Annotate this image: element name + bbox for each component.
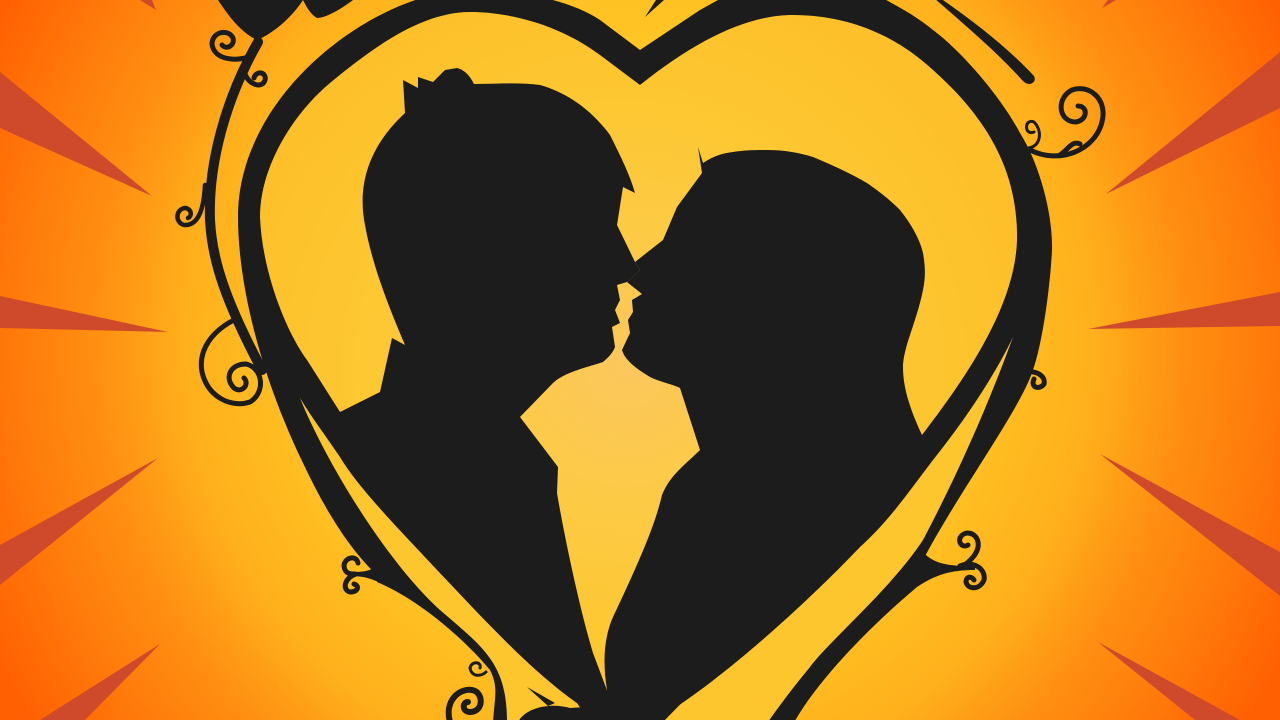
left big curl — [201, 318, 261, 404]
left yellow gap — [300, 398, 595, 720]
top and bottom ornaments — [218, 0, 664, 720]
right yellow gap — [655, 337, 1013, 720]
left lower curl — [344, 558, 358, 592]
right vine curl tail — [917, 552, 975, 587]
bottom left curls — [449, 690, 481, 720]
butterfly wings — [218, 0, 303, 40]
heart inner yellow — [260, 12, 1017, 702]
heart outer dark shape with both vines merged — [238, 0, 1052, 720]
curls — [177, 32, 1103, 720]
left outer vine — [210, 42, 262, 370]
right curls — [1030, 89, 1103, 156]
upper left curls — [212, 32, 252, 59]
top right tendril — [934, 0, 1035, 84]
heart — [210, 0, 1052, 720]
bottom ornament — [517, 706, 620, 720]
silhouette: woman — [605, 147, 930, 720]
silhouette: man — [320, 68, 640, 720]
top small spike — [645, 0, 664, 17]
left vine curl tail — [350, 566, 384, 585]
left small curl — [177, 185, 205, 225]
